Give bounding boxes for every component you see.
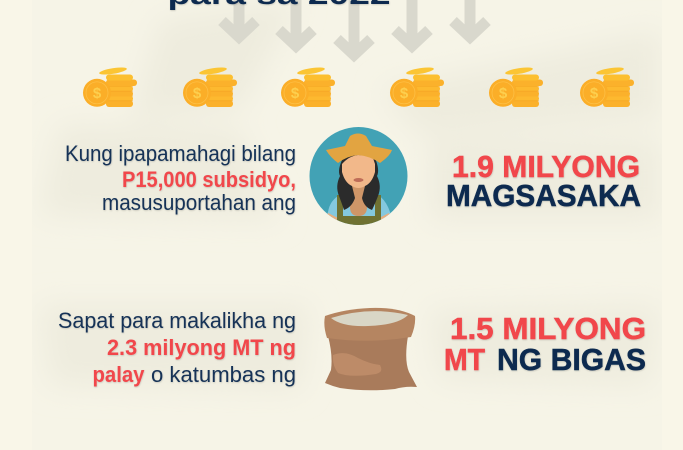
text block: palay: Sapat para makalikha ng	[58, 308, 296, 333]
stat: rice: NG BIGAS	[497, 342, 646, 377]
icon: farmer woman	[310, 127, 408, 232]
icon: coins 4: $	[400, 85, 409, 102]
icon: coins 2	[183, 66, 237, 107]
text block: palay: 2.3 milyong MT ng	[107, 335, 296, 360]
text block: subsidy: masusuportahan ang	[102, 190, 296, 215]
farmer hat	[326, 134, 392, 163]
stat: rice: 1.5 MILYONG	[450, 311, 646, 346]
stat: rice	[444, 311, 646, 377]
text block: palay: palay	[92, 362, 145, 387]
stat: farmers: 1.9 MILYONG	[452, 149, 640, 184]
icon: coins 4	[390, 66, 444, 107]
arrow 1	[222, 0, 256, 37]
panel: crumpled paper	[50, 12, 654, 384]
text block: subsidy: Kung ipapamahagi bilang	[65, 141, 296, 166]
arrow 4	[395, 0, 429, 46]
icon: coins 1: $	[93, 85, 102, 102]
arrow 2	[279, 0, 313, 46]
icon: sack of rice	[324, 308, 417, 390]
text block: palay: o katumbas ng	[151, 362, 296, 387]
stat: farmers: MAGSASAKA	[446, 178, 641, 213]
arrow 5	[453, 0, 487, 37]
arrow 3	[337, 0, 371, 55]
icon: coins 2: $	[193, 85, 202, 102]
icon: coins 3: $	[291, 85, 300, 102]
arrows pointing down	[222, 0, 487, 55]
icon: coins 6: $	[590, 85, 599, 102]
icon: coins 1	[83, 66, 137, 107]
icon: coins 6	[580, 66, 634, 107]
icon: coins 5: $	[499, 85, 508, 102]
icon: coins 5	[489, 66, 543, 107]
stat: rice: MT	[444, 342, 485, 377]
row of coin stacks	[83, 66, 634, 107]
text block: subsidy: P15,000 subsidyo,	[122, 167, 296, 192]
stat: farmers	[446, 149, 641, 213]
icon: coins 3	[281, 66, 335, 107]
text block: subsidy	[65, 141, 296, 215]
text block: palay	[58, 308, 296, 387]
